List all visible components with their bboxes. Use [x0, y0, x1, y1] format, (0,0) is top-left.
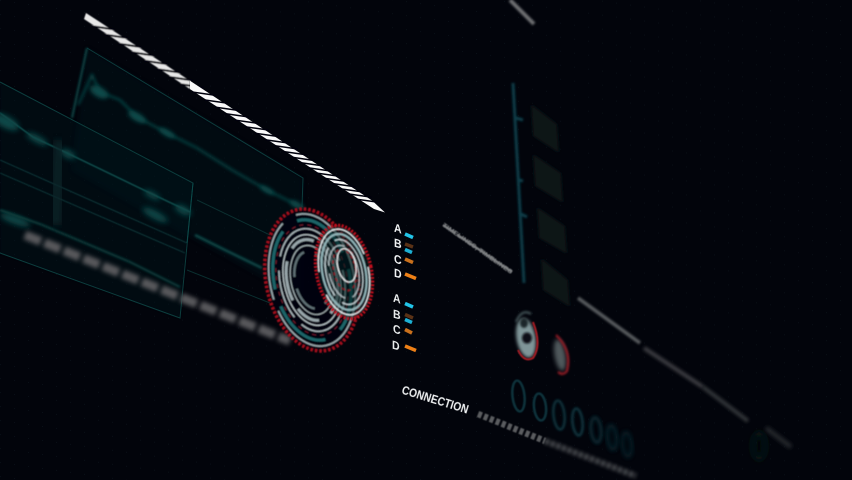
waveform peaks [88, 83, 305, 212]
legend letters: B [394, 237, 402, 252]
legend letters: C [394, 253, 402, 268]
legend letters: A [394, 222, 402, 237]
waveform trace [78, 75, 297, 205]
small radial gauge [307, 220, 381, 324]
blurred lower dashed bar [25, 235, 290, 341]
legend swatches [405, 234, 416, 278]
legend letters: C [393, 323, 401, 338]
legend letters [392, 292, 401, 354]
connection label: CONNECTION [400, 385, 470, 417]
mini gauge left [513, 312, 539, 359]
small blurred caption: TIMELINES, TIMELINES [441, 223, 513, 276]
top dashed bar [84, 13, 385, 212]
small blurred caption [441, 223, 513, 276]
legend: second ABCD group [392, 292, 416, 354]
legend: first ABCD group [394, 222, 416, 282]
legend letters [394, 222, 402, 282]
panel: front waveform [0, 82, 193, 318]
legend letters: D [394, 267, 402, 282]
large radial gauge [252, 200, 372, 360]
legend letters: B [393, 308, 401, 323]
legend letters: A [393, 292, 401, 307]
legend swatches [405, 304, 416, 350]
lower dashed bar [478, 414, 636, 476]
far right blurred icon [753, 433, 765, 459]
vertical teal scale [513, 83, 527, 283]
top blurred stub [510, 0, 534, 24]
right blurred bars [578, 298, 791, 447]
panel: back waveform [72, 48, 305, 303]
waveform blobs [0, 110, 193, 229]
mini gauge right [552, 335, 568, 374]
legend letters: D [392, 339, 400, 354]
grey blurred blocks [531, 104, 570, 307]
teal ring row [511, 380, 633, 457]
